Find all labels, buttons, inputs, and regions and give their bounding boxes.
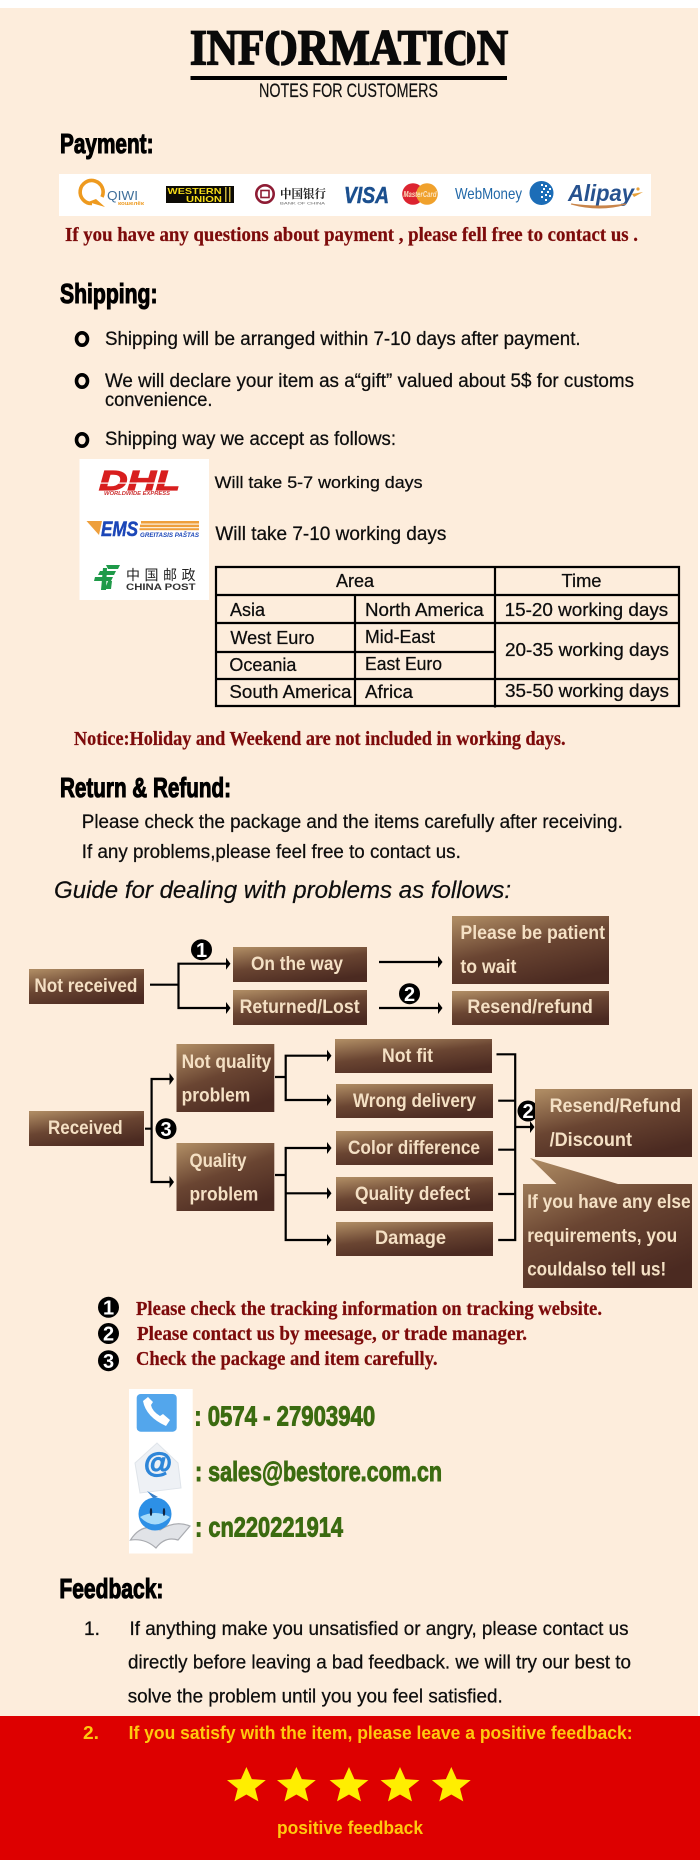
icon: phone xyxy=(137,1394,177,1432)
panel: carrier logos xyxy=(80,459,209,600)
icon: email envelope xyxy=(135,1443,181,1493)
icon: VISA logo: VISA xyxy=(344,182,389,208)
box: please be patient xyxy=(452,916,609,984)
text: return instructions: Please check the package and the items carefully after receiving. xyxy=(82,812,623,833)
badge: 2 xyxy=(399,983,420,1006)
badge: 3 xyxy=(156,1118,176,1141)
badge: 3: 3 xyxy=(160,1119,172,1141)
box: wrong delivery xyxy=(336,1084,493,1118)
icon: five stars xyxy=(227,1767,471,1801)
shipping bullet list: Shipping will be arranged within 7-10 days after payment. xyxy=(105,329,581,350)
icon: DHL logo: WORLDWIDE EXPRESS xyxy=(104,491,170,497)
shipping bullet list: We will declare your item as a“gift” valued about 5$ for customs xyxy=(105,371,634,392)
heading: return and refund: Return & Refund: xyxy=(60,772,231,803)
box: quality problem xyxy=(176,1143,274,1211)
icon: QIWI logo xyxy=(80,181,145,207)
contact: trade manager id: : cn220221914 xyxy=(195,1512,343,1543)
text: feedback item two: 2. xyxy=(83,1722,99,1743)
callout: other requirements: requirements, you xyxy=(527,1226,677,1247)
title xyxy=(190,19,508,102)
shipping bullet list: convenience. xyxy=(105,390,212,411)
box: on the way xyxy=(233,947,367,982)
arrows: not quality branch xyxy=(275,1050,332,1106)
icon: EMS logo xyxy=(86,518,200,541)
box: received: Received xyxy=(48,1118,123,1139)
text: feedback item one: solve the problem until you you feel satisfied. xyxy=(128,1687,503,1708)
text: EMS delivery time: Will take 7-10 working days xyxy=(215,524,446,545)
legend: numbered notes: 2 xyxy=(103,1324,114,1346)
text: DHL delivery time: Will take 5-7 working days xyxy=(215,473,423,492)
box: resend refund discount: Resend/Refund xyxy=(550,1096,681,1117)
box: resend refund discount xyxy=(535,1089,692,1157)
box: not received: Not received xyxy=(34,976,137,997)
icon: Bank of China logo: BANK OF CHINA xyxy=(280,202,326,206)
table: shipping time by area: 35-50 working days xyxy=(505,680,669,701)
table: shipping time by area: Mid-East xyxy=(365,626,435,647)
text: return instructions: If any problems,please feel free to contact us. xyxy=(82,842,461,863)
heading: payment: Payment: xyxy=(60,128,154,159)
box: quality defect xyxy=(336,1177,493,1211)
icon: WebMoney logo xyxy=(455,181,554,205)
icon: WebMoney logo: WebMoney xyxy=(455,186,522,203)
contact: phone number: : 0574 - 27903940 xyxy=(194,1400,375,1431)
badge: 2 xyxy=(518,1100,538,1123)
box: not quality problem: problem xyxy=(182,1086,250,1107)
text: feedback item one: directly before leaving a bad feedback. we will try our best to xyxy=(128,1653,631,1674)
flowchart: not received xyxy=(29,916,609,1025)
box: color difference xyxy=(336,1131,493,1165)
table: shipping time by area xyxy=(216,567,679,708)
icon: DHL logo xyxy=(98,465,180,497)
arrows: received branch xyxy=(145,1073,174,1188)
text: feedback item one: If anything make you unsatisfied or angry, please contact us xyxy=(130,1619,628,1640)
icon: email envelope: @ xyxy=(144,1447,172,1478)
icon: Western Union logo: WESTERN xyxy=(168,186,222,196)
table: shipping time by area: Asia xyxy=(230,599,266,620)
table: shipping time by area: Time xyxy=(562,570,602,591)
box: returned or lost: Returned/Lost xyxy=(240,997,360,1018)
icon: China Post logo xyxy=(94,565,196,593)
box: on the way: On the way xyxy=(251,954,343,975)
text: feedback item one xyxy=(84,1619,631,1708)
box: color difference: Color difference xyxy=(348,1138,480,1159)
table: shipping time by area: East Euro xyxy=(365,653,442,674)
arrow: on the way to wait xyxy=(379,956,442,968)
box: not fit xyxy=(335,1039,492,1073)
table: shipping time by area: Africa xyxy=(365,681,414,702)
icon: Bank of China logo: 中国银行 xyxy=(280,186,326,201)
legend: numbered notes: Please contact us by meesage, or trade manager. xyxy=(137,1324,527,1345)
box: please be patient: Please be patient xyxy=(460,923,606,944)
table: shipping time by area: 20-35 working days xyxy=(505,639,669,660)
title: NOTES FOR CUSTOMERS xyxy=(259,81,438,102)
panel: positive feedback xyxy=(0,1716,700,1860)
badge: 1: 1 xyxy=(196,940,207,962)
table: shipping time by area: South America xyxy=(229,681,352,702)
badge: 1 xyxy=(191,939,212,962)
icon: EMS logo: EMS xyxy=(101,518,138,541)
icon: QIWI logo: QIWI xyxy=(107,188,138,203)
box: resend or refund xyxy=(452,991,609,1025)
box: damage: Damage xyxy=(375,1228,446,1249)
icon: Alipay logo: Alipay xyxy=(567,180,635,206)
table: shipping time by area: 15-20 working days xyxy=(505,599,668,620)
icon: chat ball on book xyxy=(130,1491,190,1548)
box: received xyxy=(29,1111,144,1146)
shipping bullet list: Shipping way we accept as follows: xyxy=(105,429,396,450)
icon: MasterCard logo xyxy=(402,183,438,205)
icon: DHL logo: DHL xyxy=(99,465,180,496)
legend: numbered notes: 3 xyxy=(103,1351,114,1373)
box: resend or refund: Resend/refund xyxy=(467,997,593,1018)
box: damage xyxy=(336,1222,493,1256)
box: wrong delivery: Wrong delivery xyxy=(353,1091,476,1112)
table: shipping time by area: West Euro xyxy=(230,627,314,648)
legend: numbered notes: 1 xyxy=(103,1297,114,1319)
icon: EMS logo: GREITASIS PAŠTAS xyxy=(140,530,200,539)
legend: numbered notes xyxy=(98,1297,602,1373)
shipping bullet list xyxy=(76,329,634,450)
box: not quality problem xyxy=(176,1044,274,1112)
icon: China Post logo: CHINA POST xyxy=(126,582,196,593)
arrow: lost to resend xyxy=(379,1002,442,1014)
box: please be patient: to wait xyxy=(460,957,517,978)
box: not fit: Not fit xyxy=(382,1046,434,1067)
box: quality problem: problem xyxy=(190,1185,258,1206)
arrows: quality branch xyxy=(275,1142,332,1246)
arrows: not received branch xyxy=(150,958,230,1014)
panel: contact icons xyxy=(129,1389,193,1554)
icon: Western Union logo: UNION xyxy=(186,194,222,204)
text: holiday notice: Notice:Holiday and Weekend are not included in working days. xyxy=(74,729,566,750)
table: shipping time by area: North America xyxy=(365,599,484,620)
callout: other requirements xyxy=(523,1158,692,1288)
icon: QIWI logo: кошелёк xyxy=(118,201,145,207)
heading: feedback: Feedback: xyxy=(59,1573,163,1604)
heading: shipping: Shipping: xyxy=(60,278,158,309)
text: positive feedback label: positive feedback xyxy=(277,1817,424,1838)
icon: Western Union logo xyxy=(166,186,234,204)
box: not quality problem: Not quality xyxy=(182,1052,272,1073)
text: feedback item two: If you satisfy with the item, please leave a positive feedback: xyxy=(129,1722,633,1743)
icon: Bank of China logo xyxy=(256,185,326,206)
legend: numbered notes: Please check the tracking information on tracking website. xyxy=(136,1299,602,1320)
legend: numbered notes: Check the package and item carefully. xyxy=(136,1349,438,1370)
box: resend refund discount: /Discount xyxy=(550,1130,633,1151)
text: feedback item one: 1. xyxy=(84,1619,100,1640)
table: shipping time by area: Oceania xyxy=(229,654,297,675)
icon: MasterCard logo: MasterCard xyxy=(404,190,437,199)
table: shipping time by area: Area xyxy=(336,570,375,591)
title: INFORMATION xyxy=(190,19,508,75)
icon: China Post logo: 中国邮政 xyxy=(126,567,196,583)
flowchart: received xyxy=(29,1039,692,1288)
contact: email address: : sales@bestore.com.cn xyxy=(195,1456,442,1487)
box: quality problem: Quality xyxy=(190,1151,247,1172)
panel: payment logos xyxy=(59,174,651,216)
badge: 2: 2 xyxy=(522,1101,534,1123)
box: returned or lost xyxy=(233,990,367,1025)
box: quality defect: Quality defect xyxy=(355,1184,471,1205)
arrows: merge to resend xyxy=(496,1053,534,1241)
text: return instructions xyxy=(82,812,623,863)
box: not received xyxy=(29,969,144,1004)
badge: 2: 2 xyxy=(404,984,415,1006)
heading: guide: Guide for dealing with problems as follows: xyxy=(54,877,511,904)
callout: other requirements: couldalso tell us! xyxy=(527,1260,666,1281)
text: payment contact note: If you have any questions about payment , please fell free to contact us . xyxy=(65,225,638,246)
